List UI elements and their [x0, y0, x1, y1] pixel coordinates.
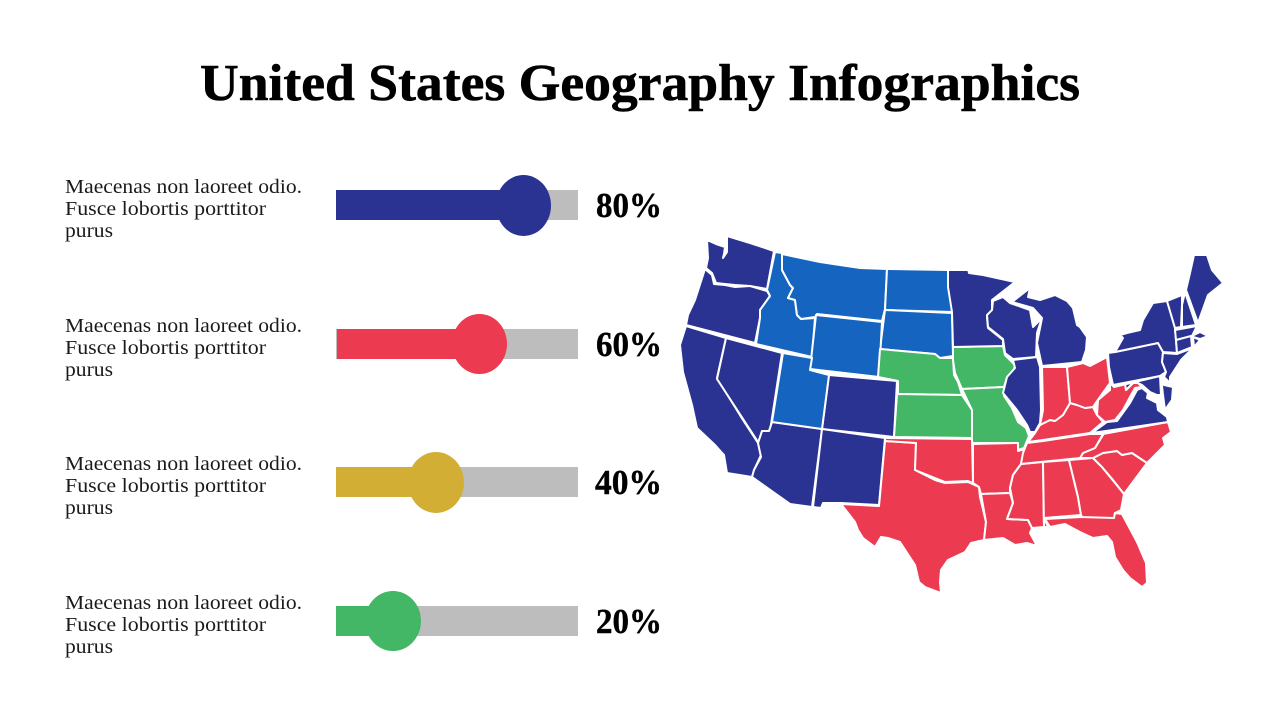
US map — [680, 236, 1223, 593]
text block: Fusce lobortis porttitor — [65, 614, 266, 636]
title: United States Geography Infographics — [200, 55, 1080, 112]
text block: Fusce lobortis porttitor — [65, 337, 266, 359]
blue states: northern plains and rockies — [756, 252, 953, 429]
text block: purus — [65, 497, 113, 519]
text block: Maecenas non laoreet odio. — [65, 453, 302, 475]
text block: purus — [65, 359, 113, 381]
text block: Maecenas non laoreet odio. — [65, 592, 302, 614]
row: 80 percent — [65, 175, 662, 242]
text block — [65, 176, 302, 242]
green states: central plains — [878, 346, 1029, 450]
value 80%: 80% — [596, 186, 662, 225]
value 20%: 20% — [596, 602, 662, 641]
text block — [65, 315, 302, 381]
row: 60 percent — [65, 314, 662, 381]
text block: purus — [65, 220, 113, 242]
red states: south — [841, 357, 1171, 593]
navy states: west — [680, 236, 897, 508]
progress bar 80 — [336, 175, 578, 236]
row: 40 percent — [65, 452, 662, 519]
row: 20 percent — [65, 591, 662, 658]
text block — [65, 592, 302, 658]
text block: purus — [65, 636, 113, 658]
navy states: north and east — [948, 255, 1223, 433]
text block: Maecenas non laoreet odio. — [65, 176, 302, 198]
progress bar 20 — [336, 591, 578, 651]
text block: Maecenas non laoreet odio. — [65, 315, 302, 337]
progress bar 40 — [336, 452, 578, 513]
text block — [65, 453, 302, 519]
value 60%: 60% — [596, 325, 662, 364]
text block: Fusce lobortis porttitor — [65, 475, 266, 497]
progress bar 60 — [336, 314, 578, 374]
text block: Fusce lobortis porttitor — [65, 198, 266, 220]
value 40%: 40% — [595, 463, 662, 502]
